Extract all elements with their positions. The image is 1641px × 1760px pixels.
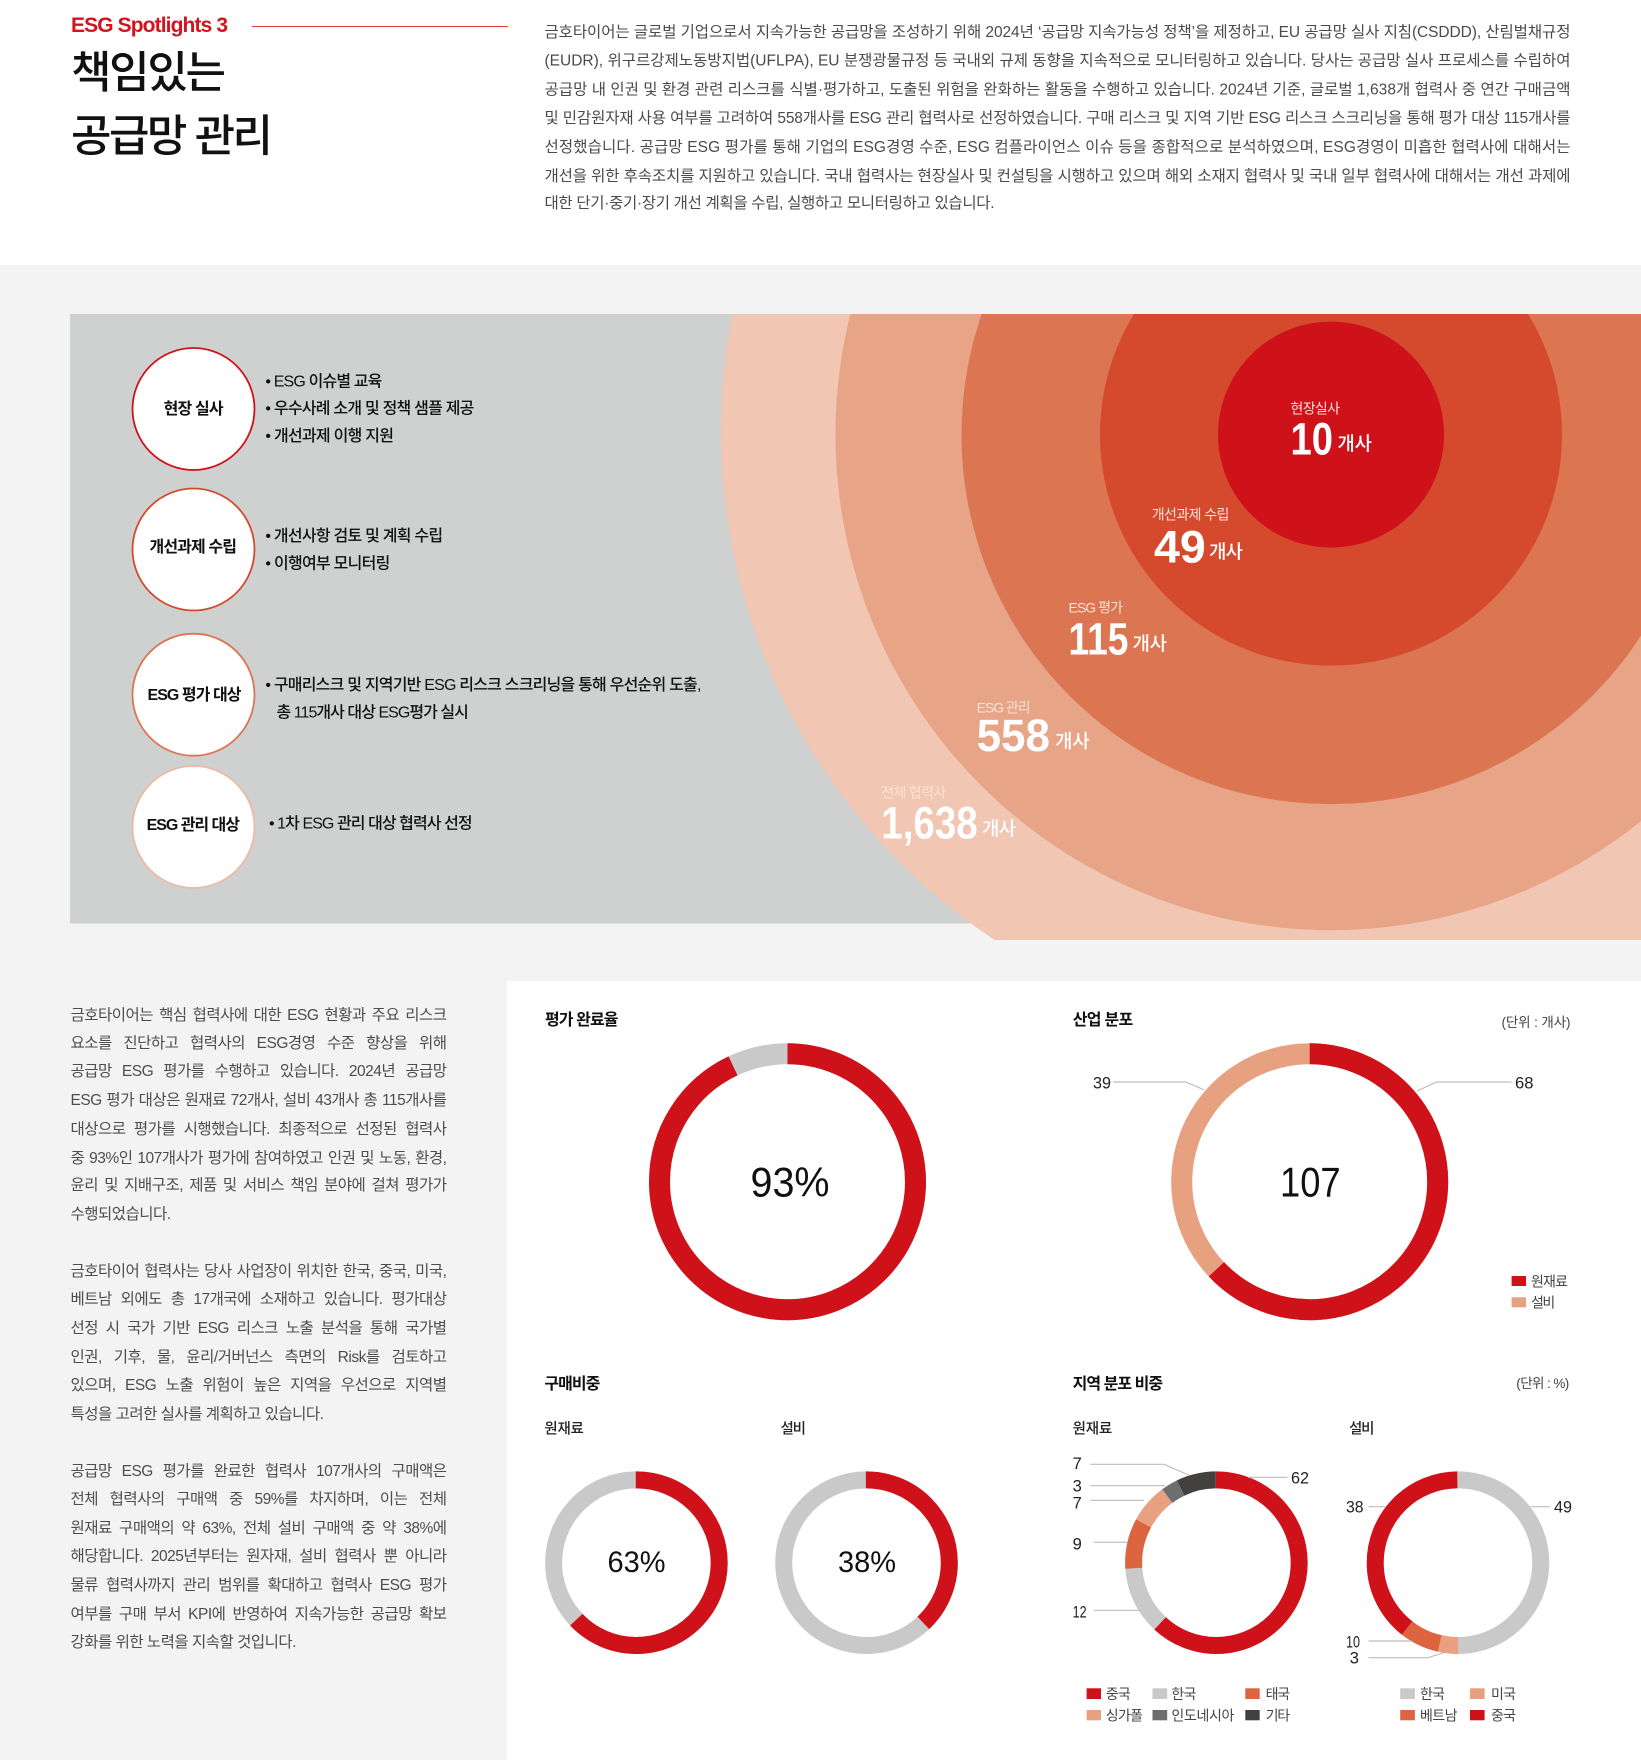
text block: supply chain assessment description: 공급망 ESG 평가를 완료한 협력사 107개사의 구매액은 [70,1463,446,1480]
legend: raw materials regions: 중국 [1106,1686,1131,1702]
stat: ESG managed 558: ESG 관리 [977,699,1031,715]
stat: on-site audits 10: 현장실사 [1290,401,1340,417]
chart: assessment completion rate: 평가 완료율 [545,1011,619,1029]
legend: equipment regions [1400,1686,1516,1723]
legend: equipment regions: 미국 [1491,1686,1516,1702]
chart: assessment completion rate [545,1011,916,1310]
text block: supply chain assessment description: 인권, 기후, 물, 윤리/거버넌스 측면의 Risk를 검토하고 [70,1349,446,1366]
text block: supply chain assessment description: 수행되었습니다. [70,1206,171,1223]
donut: raw materials by region: 7 [1073,1455,1082,1473]
chart: assessment completion rate: 93% [750,1159,830,1206]
chart: industry distribution: 산업 분포 [1073,1011,1133,1029]
legend: equipment regions: 베트남 [1420,1707,1458,1723]
legend: raw materials regions [1087,1686,1290,1723]
chart group: regional distribution: 지역 분포 비중 [1073,1375,1163,1393]
text block: supply chain assessment description: 공급망 ESG 평가를 수행하고 있습니다. 2024년 공급망 [70,1063,446,1080]
chart group: regional distribution [1073,1375,1572,1723]
step: on-site audit: • ESG 이슈별 교육 [265,373,382,391]
step: ESG assessment target: ESG 평가 대상 [148,686,242,704]
panel: header [0,0,1641,265]
step: ESG assessment target [132,634,701,756]
intro paragraph: 선정했습니다. 공급망 ESG 평가를 통해 기업의 ESG경영 수준, ESG 컴플라이언스 이슈 등을 종합적으로 분석하였으며, ESG경영이 미흡한 협력사에 대해서는 [544,138,1570,156]
legend: raw materials regions: 인도네시아 [1171,1707,1235,1723]
legend: equipment regions: 한국 [1420,1686,1445,1702]
stat: ESG managed 558: 558 [977,710,1050,761]
step: on-site audit [132,348,474,470]
intro paragraph: 개선을 위한 후속조치를 지원하고 있습니다. 국내 협력사는 현장실사 및 컨설팅을 시행하고 있으며 해외 소재지 협력사 및 국내 일부 협력사에 대해서는 개선 과제에 [544,167,1570,185]
chart group: purchase share: 구매비중 [544,1375,601,1393]
donut: equipment by region [1346,1421,1572,1723]
chart: industry distribution: 39 [1093,1075,1111,1093]
step: ESG management target: ESG 관리 대상 [147,816,240,834]
donut: raw materials 63% [544,1421,719,1646]
donut: raw materials by region: 9 [1073,1536,1082,1554]
stat: ESG managed 558 [977,699,1090,761]
donut: raw materials by region: 12 [1073,1604,1087,1622]
panel: supplier funnel [70,314,1641,940]
legend: raw materials regions: 기타 [1266,1707,1290,1723]
stat: on-site audits 10: 개사 [1337,433,1373,455]
donut: equipment by region: 10 [1346,1633,1360,1651]
step: improvement plan: • 이행여부 모니터링 [265,555,390,573]
title: 공급망 관리 [71,112,273,161]
stat: improvement plans 49 [1152,507,1244,572]
intro paragraph: 금호타이어는 글로벌 기업으로서 지속가능한 공급망을 조성하기 위해 2024년 ‘공급망 지속가능성 정책’을 제정하고, EU 공급망 실사 지침(CSDDD), 산림벌채규정 [544,23,1570,41]
chart: industry distribution: (단위 : 개사) [1502,1015,1570,1030]
intro paragraph: 공급망 내 인권 및 환경 관련 리스크를 식별·평가하고, 도출된 위험을 완화하는 활동을 수행하고 있습니다. 2024년 기준, 글로벌 1,638개 협력사 중 연간 구매금액 [544,81,1570,99]
text block: supply chain assessment description: 강화를 위한 노력을 지속할 것입니다. [70,1634,296,1651]
step: improvement plan: • 개선사항 검토 및 계획 수립 [265,527,443,545]
chart: industry distribution: 68 [1515,1075,1534,1093]
stat: all suppliers 1,638: 1,638 [881,798,978,849]
text block: supply chain assessment description: ESG 평가 대상은 원재료 72개사, 설비 43개사 총 115개사를 [70,1092,446,1109]
stat: on-site audits 10 [1290,401,1373,465]
stat: improvement plans 49: 개선과제 수립 [1152,507,1229,523]
legend: industry [1512,1274,1568,1311]
text block: supply chain assessment description: 금호타이어는 핵심 협력사에 대한 ESG 현황과 주요 리스크 [70,1007,446,1024]
legend: equipment regions: 중국 [1491,1707,1516,1723]
stat: ESG managed 558: 개사 [1055,731,1090,753]
donut: raw materials by region: 7 [1073,1495,1082,1513]
legend: industry: 원재료 [1531,1274,1568,1290]
stat: all suppliers 1,638: 개사 [982,818,1017,840]
concentric circles [721,314,1641,940]
text block: supply chain assessment description: 원재료 구매액의 약 63%, 전체 설비 구매액 중 약 38%에 [70,1520,446,1537]
donut: raw materials 63%: 63% [608,1546,666,1579]
donut: equipment 38% [780,1421,949,1646]
intro paragraph [544,23,1570,212]
step: ESG assessment target: • 구매리스크 및 지역기반 ESG 리스크 스크리닝을 통해 우선순위 도출, [265,676,701,694]
step: on-site audit: 현장 실사 [164,400,224,418]
legend: raw materials regions: 한국 [1171,1686,1197,1702]
text block: supply chain assessment description: 중 93%인 107개사가 평가에 참여하였고 인권 및 노동, 환경, [70,1150,446,1167]
donut: equipment 38%: 38% [838,1546,896,1579]
donut: raw materials by region: 3 [1073,1477,1082,1495]
stat: ESG assessment 115: ESG 평가 [1068,599,1123,615]
chart: industry distribution: 107 [1280,1159,1341,1206]
legend: industry: 설비 [1531,1295,1555,1311]
step: on-site audit: • 우수사례 소개 및 정책 샘플 제공 [265,400,474,418]
chart: industry distribution [1073,1011,1570,1311]
legend: raw materials regions: 싱가폴 [1106,1707,1143,1723]
stat: improvement plans 49: 개사 [1209,541,1244,563]
stat: ESG assessment 115: 개사 [1132,633,1168,655]
donut: raw materials 63%: 원재료 [544,1421,584,1438]
text block: supply chain assessment description: 요소를 진단하고 협력사의 ESG경영 수준 향상을 위해 [70,1035,446,1052]
text block: supply chain assessment description: 물류 협력사까지 관리 범위를 확대하고 협력사 ESG 평가 [70,1577,446,1594]
section tag: ESG Spotlights 3 [71,14,228,37]
title [71,49,273,161]
step: on-site audit: • 개선과제 이행 지원 [265,427,394,445]
text block: supply chain assessment description: 베트남 외에도 총 17개국에 소재하고 있습니다. 평가대상 [70,1291,446,1308]
step: improvement plan [132,488,443,610]
panel: charts [507,981,1641,1760]
donut: equipment by region: 38 [1346,1498,1364,1516]
stat: ESG assessment 115 [1068,599,1168,665]
text block: supply chain assessment description: 대상으로 평가를 시행했습니다. 최종적으로 선정된 협력사 [70,1121,446,1138]
text block: supply chain assessment description: 특성을 고려한 실사를 계획하고 있습니다. [70,1406,323,1423]
text block: supply chain assessment description: 해당합니다. 2025년부터는 원자재, 설비 협력사 뿐 아니라 [70,1548,446,1565]
text block: supply chain assessment description: 선정 시 국가 기반 ESG 리스크 노출 분석을 통해 국가별 [70,1320,446,1337]
stat: ESG assessment 115: 115 [1068,614,1128,665]
step: ESG management target: • 1차 ESG 관리 대상 협력사 선정 [269,815,473,833]
title: 책임있는 [71,49,226,98]
text block: supply chain assessment description [70,1007,447,1651]
donut: equipment by region: 설비 [1349,1421,1374,1438]
donut: equipment 38%: 설비 [780,1421,806,1438]
donut: raw materials by region [1073,1421,1309,1723]
intro paragraph: (EUDR), 위구르강제노동방지법(UFLPA), EU 분쟁광물규정 등 국내외 규제 동향을 지속적으로 모니터링하고 있습니다. 당사는 공급망 실사 프로세스를 수립하여 [544,51,1570,70]
text block: supply chain assessment description: 있으며, ESG 노출 위험이 높은 지역을 우선으로 지역별 [70,1377,446,1394]
stat: on-site audits 10: 10 [1290,414,1333,465]
step: improvement plan: 개선과제 수립 [150,538,237,556]
chart group: purchase share [544,1375,949,1646]
text block: supply chain assessment description: 여부를 구매 부서 KPI에 반영하여 지속가능한 공급망 확보 [70,1606,446,1623]
stat: improvement plans 49: 49 [1154,521,1206,572]
step: ESG assessment target: 총 115개사 대상 ESG평가 실시 [276,704,469,722]
donut: raw materials by region: 62 [1291,1470,1309,1488]
stat: all suppliers 1,638: 전체 협력사 [881,785,946,801]
stat: all suppliers 1,638 [881,785,1017,849]
intro paragraph: 및 민감원자재 사용 여부를 고려하여 558개사를 ESG 관리 협력사로 선정하였습니다. 구매 리스크 및 지역 기반 ESG 리스크 스크리닝을 통해 평가 대상 115개사를 [544,109,1570,127]
text block: supply chain assessment description: 전체 협력사의 구매액 중 59%를 차지하며, 이는 전체 [70,1491,446,1508]
donut: equipment by region: 3 [1350,1649,1359,1667]
legend: raw materials regions: 태국 [1266,1686,1290,1702]
donut: equipment by region: 49 [1554,1498,1572,1516]
step: ESG management target [132,766,473,888]
chart group: regional distribution: (단위 : %) [1516,1376,1569,1391]
intro paragraph: 대한 단기·중기·장기 개선 계획을 수립, 실행하고 모니터링하고 있습니다. [544,194,994,212]
donut: raw materials by region: 원재료 [1073,1421,1112,1438]
text block: supply chain assessment description: 금호타이어 협력사는 당사 사업장이 위치한 한국, 중국, 미국, [70,1263,446,1280]
text block: supply chain assessment description: 윤리 및 지배구조, 제품 및 서비스 책임 분야에 걸쳐 평가가 [70,1177,446,1194]
